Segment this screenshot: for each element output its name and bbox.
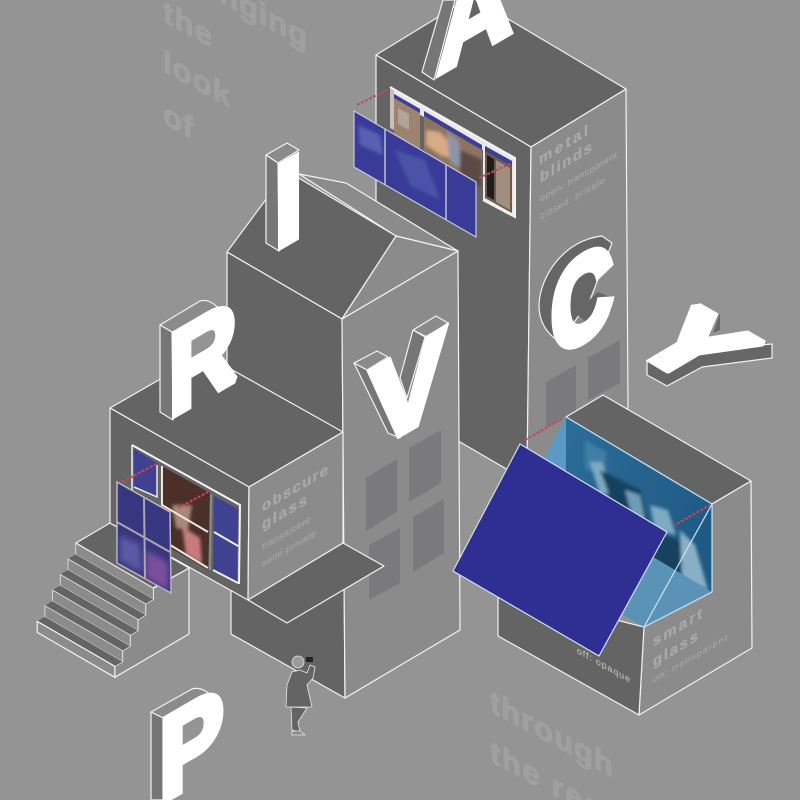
background title text: changing the look of: look bbox=[163, 44, 230, 116]
smart glass box bbox=[498, 395, 752, 715]
window: open blinds with film scene bbox=[390, 87, 515, 217]
staircase bbox=[37, 523, 189, 677]
label: metal blinds bbox=[539, 122, 617, 223]
gabled house bbox=[227, 171, 460, 698]
letter R: R bbox=[168, 273, 237, 444]
red sight lines: obscure glass bbox=[122, 464, 208, 508]
blinds panel: closed metal blinds bbox=[354, 111, 476, 237]
tall tower: metal blinds bbox=[376, 0, 628, 481]
letter Y: Y bbox=[606, 292, 785, 397]
label: smart glass bbox=[577, 604, 727, 686]
letter I: I bbox=[268, 118, 309, 285]
label: smart glass: off: opaque bbox=[577, 646, 630, 685]
label: obscure glass bbox=[262, 461, 328, 570]
figure: man with camera bbox=[286, 656, 315, 735]
label: obscure glass: glass bbox=[262, 491, 307, 534]
label: smart glass: on: transparent bbox=[653, 633, 727, 686]
label: obscure glass: obscure bbox=[262, 461, 328, 516]
label: metal blinds: closed: private bbox=[540, 175, 605, 223]
background title text: changing the look of: of bbox=[163, 96, 194, 147]
label: metal blinds: blinds bbox=[540, 138, 592, 187]
label: metal blinds: metal bbox=[539, 122, 588, 169]
awning bbox=[248, 543, 384, 623]
obscure glass box bbox=[110, 354, 384, 623]
label: obscure glass: translucent bbox=[262, 515, 310, 553]
red sight lines: smart glass bbox=[525, 419, 710, 526]
house wall windows bbox=[366, 430, 444, 600]
background title text: through the rear: through bbox=[490, 684, 613, 785]
label: metal blinds: open: transparent bbox=[540, 150, 617, 205]
background title text: changing the look of bbox=[163, 0, 307, 147]
tower wall windows bbox=[546, 340, 620, 428]
letter C: C bbox=[551, 215, 612, 384]
red sight lines: metal blinds bbox=[357, 89, 512, 178]
label: smart glass: glass bbox=[653, 627, 698, 671]
label: smart glass: smart bbox=[653, 604, 703, 651]
label: obscure glass: semi-private bbox=[262, 528, 316, 570]
letter V: V bbox=[370, 303, 445, 477]
obscure glass panel bbox=[117, 482, 171, 593]
windows with film scene bbox=[132, 445, 240, 584]
smart glass panel: opaque blue bbox=[453, 444, 667, 656]
recess with film scene in blue bbox=[544, 416, 713, 628]
